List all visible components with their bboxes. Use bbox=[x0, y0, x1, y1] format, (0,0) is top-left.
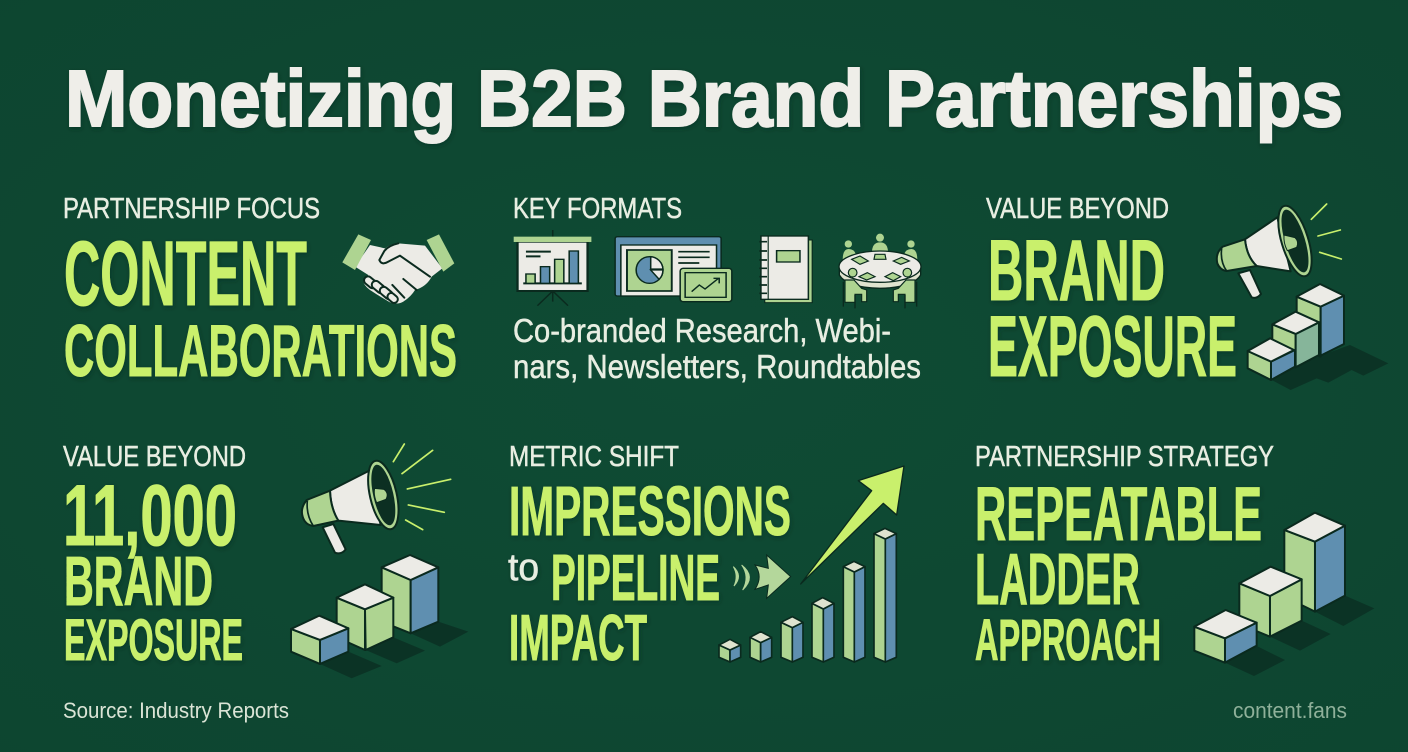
panel: value beyond brand exposure bbox=[986, 193, 1388, 395]
headline: repeatable ladder approach: LADDER bbox=[975, 540, 1140, 620]
panel: partnership strategy bbox=[975, 441, 1374, 676]
label: metric shift: METRIC SHIFT bbox=[509, 441, 679, 473]
headline: repeatable ladder approach bbox=[975, 472, 1262, 673]
headline: 11,000 brand exposure: BRAND bbox=[64, 542, 213, 620]
headline: 11,000 brand exposure: EXPOSURE bbox=[64, 608, 243, 673]
headline: content collaborations: CONTENT bbox=[64, 223, 307, 325]
headline: content collaborations: COLLABORATIONS bbox=[64, 311, 457, 392]
icon: chevron arrow bbox=[733, 555, 791, 598]
icon: presentation board bbox=[514, 230, 591, 306]
icons: key formats bbox=[514, 230, 921, 308]
icon: growth arrow bbox=[801, 466, 904, 584]
bars bbox=[719, 528, 896, 662]
headline: impressions to pipeline impact: IMPACT bbox=[509, 601, 647, 674]
description: key formats: Co-branded Research, Webi- bbox=[513, 312, 891, 349]
icon: stepped cubes bbox=[1248, 284, 1388, 390]
icon: notebook bbox=[759, 236, 812, 303]
label: key formats: KEY FORMATS bbox=[513, 193, 682, 225]
title: Monetizing B2B Brand Partnerships bbox=[65, 54, 1343, 143]
icon: ladder cubes bbox=[1194, 513, 1374, 676]
panel: 11,000 brand exposure bbox=[63, 441, 468, 678]
label: value beyond: VALUE BEYOND bbox=[986, 193, 1169, 225]
headline: 11,000 brand exposure bbox=[63, 468, 243, 673]
icon: webinar screen bbox=[615, 237, 732, 302]
description: key formats bbox=[513, 312, 921, 385]
icon: cubes bbox=[291, 555, 468, 678]
label: partnership strategy: PARTNERSHIP STRATEGY bbox=[975, 441, 1274, 473]
label: partnership focus: PARTNERSHIP FOCUS bbox=[63, 193, 320, 225]
panel: key formats bbox=[513, 193, 921, 385]
headline: impressions to pipeline impact: IMPRESSIONS bbox=[509, 472, 791, 550]
brand credit: content.fans bbox=[1233, 698, 1347, 723]
panel: partnership focus bbox=[63, 193, 457, 392]
headline: content collaborations bbox=[64, 223, 457, 392]
icon: growth bars and arrow bbox=[719, 466, 904, 662]
headline: 11,000 brand exposure: 11,000 bbox=[63, 468, 237, 564]
headline: impressions to pipeline impact: PIPELINE bbox=[551, 541, 720, 614]
headline: brand exposure bbox=[988, 223, 1237, 395]
source note: Source: Industry Reports bbox=[63, 698, 289, 723]
icon: megaphone bbox=[1217, 202, 1341, 298]
icon: handshake bbox=[342, 234, 454, 304]
description: key formats: nars, Newsletters, Roundtables bbox=[513, 348, 921, 385]
headline: repeatable ladder approach: APPROACH bbox=[975, 608, 1161, 673]
panel: metric shift bbox=[508, 441, 904, 674]
icon: roundtable bbox=[839, 234, 921, 308]
headline: brand exposure: BRAND bbox=[988, 223, 1165, 319]
icon: megaphone bbox=[302, 444, 451, 553]
headline: impressions to pipeline impact bbox=[508, 472, 791, 674]
headline: impressions to pipeline impact: to bbox=[508, 547, 539, 589]
label: value beyond: VALUE BEYOND bbox=[63, 441, 246, 473]
